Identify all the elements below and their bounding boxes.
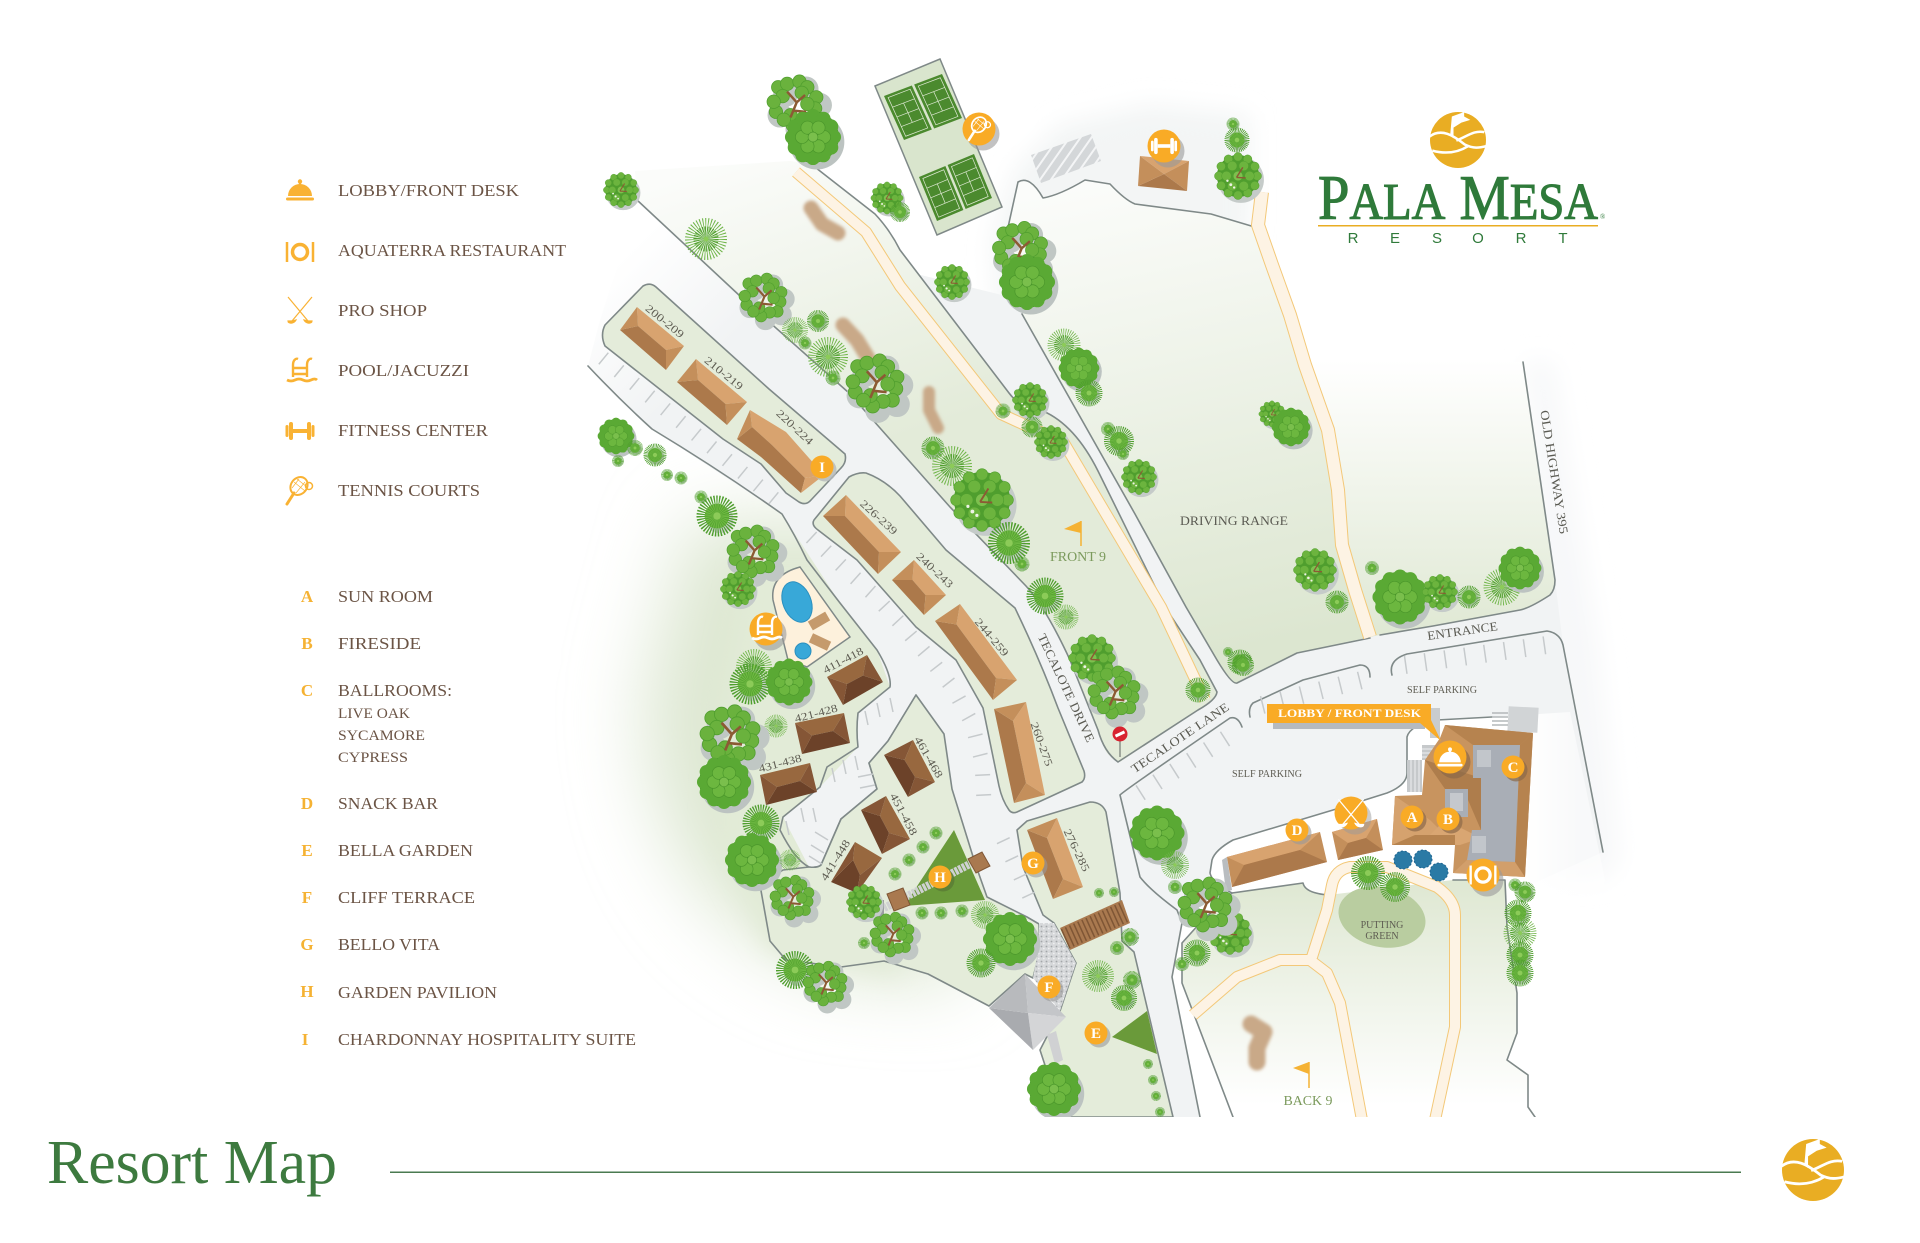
legend: lettered venues: SUN ROOM: [338, 587, 433, 606]
title: Resort Map: [47, 1129, 337, 1197]
legend: lettered venues: CHARDONNAY HOSPITALITY SUITE: [338, 1030, 636, 1049]
map labels: 461-468: [911, 735, 945, 781]
icon: dumbbell: [286, 422, 314, 440]
background haze: [645, 105, 1620, 985]
map markers: [750, 112, 1528, 1048]
map labels: 276-285: [1061, 827, 1092, 874]
legend: amenities: POOL/JACUZZI: [338, 361, 469, 380]
map: [588, 59, 1620, 1120]
legend: lettered venues: C: [301, 681, 313, 700]
putting green: GREEN: [1365, 931, 1399, 942]
legend: lettered venues: SYCAMORE: [338, 728, 425, 744]
footer rule: [390, 1172, 1741, 1173]
legend: amenities: [286, 179, 566, 504]
map labels: FRONT 9: [1050, 549, 1106, 564]
icon: golf clubs: [288, 297, 312, 323]
logo: Pala Mesa Resort: S: [1432, 230, 1442, 247]
driving range: [1007, 180, 1370, 683]
logo: Pala Mesa Resort: R: [1348, 230, 1359, 247]
map markers: F: [1044, 980, 1054, 996]
map markers: C: [1508, 760, 1518, 776]
legend: lettered venues: FIRESIDE: [338, 634, 421, 653]
icon: lobby bell: [286, 179, 314, 200]
island: buildings 200-224: [602, 284, 846, 504]
map labels: SELF PARKING: [1407, 685, 1477, 696]
legend: lettered venues: LIVE OAK: [338, 706, 411, 722]
island: building 276-285 and Bella Garden: [1017, 802, 1173, 1117]
fairway: front 9: [635, 161, 1217, 762]
hotel stairs and service pad: [1407, 706, 1539, 792]
legend: lettered venues: GARDEN PAVILION: [338, 983, 497, 1002]
icon: restaurant plate: [287, 242, 313, 262]
footer logo: [1781, 1139, 1845, 1201]
legend: amenities: TENNIS COURTS: [338, 481, 480, 500]
map labels: ENTRANCE: [1426, 619, 1499, 643]
logo: Pala Mesa Resort: T: [1558, 230, 1568, 247]
map labels: OLD HIGHWAY 395: [1537, 409, 1571, 535]
legend: amenities: FITNESS CENTER: [338, 421, 488, 440]
pool deck: [773, 567, 850, 667]
logo: Pala Mesa Resort: ®: [1600, 213, 1606, 221]
island: buildings 226-275: [813, 473, 1085, 813]
road edges: [588, 366, 1603, 1117]
legend: lettered venues: [300, 587, 636, 1049]
logo: Pala Mesa Resort: E: [1390, 230, 1400, 247]
map labels: 226-239: [857, 498, 900, 538]
legend: lettered venues: H: [300, 982, 314, 1001]
patio umbrellas: [1394, 850, 1448, 881]
icon: pool ladder: [287, 359, 317, 381]
lobby callout: [1267, 704, 1441, 741]
logo: Pala Mesa Resort: [1318, 112, 1606, 247]
legend: lettered venues: D: [301, 794, 313, 813]
building: snack bar: [1222, 832, 1327, 892]
map markers: B: [1443, 812, 1453, 828]
map labels: 260-275: [1028, 721, 1055, 769]
cart paths: [796, 172, 1455, 1120]
map markers: I: [819, 460, 825, 476]
cliff terrace path: [1033, 923, 1076, 1011]
legend: amenities: PRO SHOP: [338, 301, 427, 320]
road network: [606, 275, 1544, 1117]
legend: lettered venues: BELLA GARDEN: [338, 841, 473, 860]
east field: [1330, 361, 1556, 637]
legend: lettered venues: A: [301, 587, 314, 606]
map labels: 421-428: [793, 702, 840, 725]
parking lot hatch: [1031, 134, 1101, 183]
footbridge: [1060, 900, 1130, 950]
legend: lettered venues: SNACK BAR: [338, 794, 438, 813]
legend: lettered venues: CLIFF TERRACE: [338, 888, 475, 907]
tennis courts: [875, 59, 1002, 235]
map labels: 220-224: [773, 408, 816, 448]
logo: Pala Mesa Resort: O: [1472, 230, 1484, 247]
legend: lettered venues: BALLROOMS:: [338, 681, 452, 700]
building: hotel: [1392, 725, 1533, 877]
map markers: A: [1407, 810, 1418, 826]
map labels: TECALOTE DRIVE: [1035, 632, 1097, 745]
map labels: 210-219: [702, 355, 745, 393]
building: pro shop: [1332, 819, 1383, 860]
cliff terrace gazebo: [989, 974, 1066, 1064]
legend: lettered venues: BELLO VITA: [338, 935, 440, 954]
bunkers: [811, 208, 1264, 1062]
legend: lettered venues: I: [302, 1030, 309, 1049]
map labels: 411-418: [821, 645, 866, 677]
map labels: [643, 303, 1571, 1108]
map labels: BACK 9: [1284, 1093, 1333, 1108]
legend: lettered venues: E: [301, 841, 313, 860]
parking stalls: [603, 358, 1547, 898]
garden pavilion lawn: [868, 830, 990, 918]
map markers: G: [1027, 856, 1039, 872]
hotel grounds: [1199, 712, 1568, 908]
back 9 field: [1182, 880, 1535, 1117]
map markers: E: [1091, 1026, 1101, 1042]
map labels: DRIVING RANGE: [1180, 514, 1288, 528]
putting green: [1338, 886, 1426, 948]
logo: Pala Mesa Resort: PALA MESA: [1318, 163, 1598, 233]
fitness building: [1138, 156, 1189, 191]
map labels: 431-438: [757, 752, 804, 775]
icon: tennis racket: [287, 474, 312, 504]
logo: Pala Mesa Resort: R: [1516, 230, 1527, 247]
legend: lettered venues: F: [302, 888, 312, 907]
map labels: 451-458: [887, 791, 920, 838]
legend: lettered venues: G: [300, 935, 314, 954]
stop sign: [1112, 726, 1128, 757]
island: garden villas: [760, 695, 1040, 1006]
legend: lettered venues: B: [301, 634, 313, 653]
legend: amenities: AQUATERRA RESTAURANT: [338, 241, 566, 260]
putting green: PUTTING: [1361, 920, 1403, 931]
map labels: 441-448: [819, 837, 853, 883]
map markers: D: [1292, 823, 1303, 839]
lobby callout: LOBBY / FRONT DESK: [1278, 706, 1422, 720]
legend: lettered venues: CYPRESS: [338, 750, 408, 766]
map labels: 240-243: [913, 551, 956, 591]
map labels: TECALOTE LANE: [1128, 700, 1232, 776]
map labels: 200-209: [643, 303, 686, 341]
bella garden lawn: [1112, 1011, 1157, 1054]
trees: [598, 75, 1544, 1120]
flag: back 9: [1293, 1062, 1309, 1088]
legend: amenities: LOBBY/FRONT DESK: [338, 181, 519, 200]
map labels: SELF PARKING: [1232, 769, 1302, 780]
flag: front 9: [1064, 521, 1081, 546]
map markers: H: [934, 870, 946, 886]
buildings: units 411-468: [760, 655, 935, 893]
map labels: 244-259: [972, 616, 1011, 660]
buildings: units 200-285: [620, 307, 1083, 899]
